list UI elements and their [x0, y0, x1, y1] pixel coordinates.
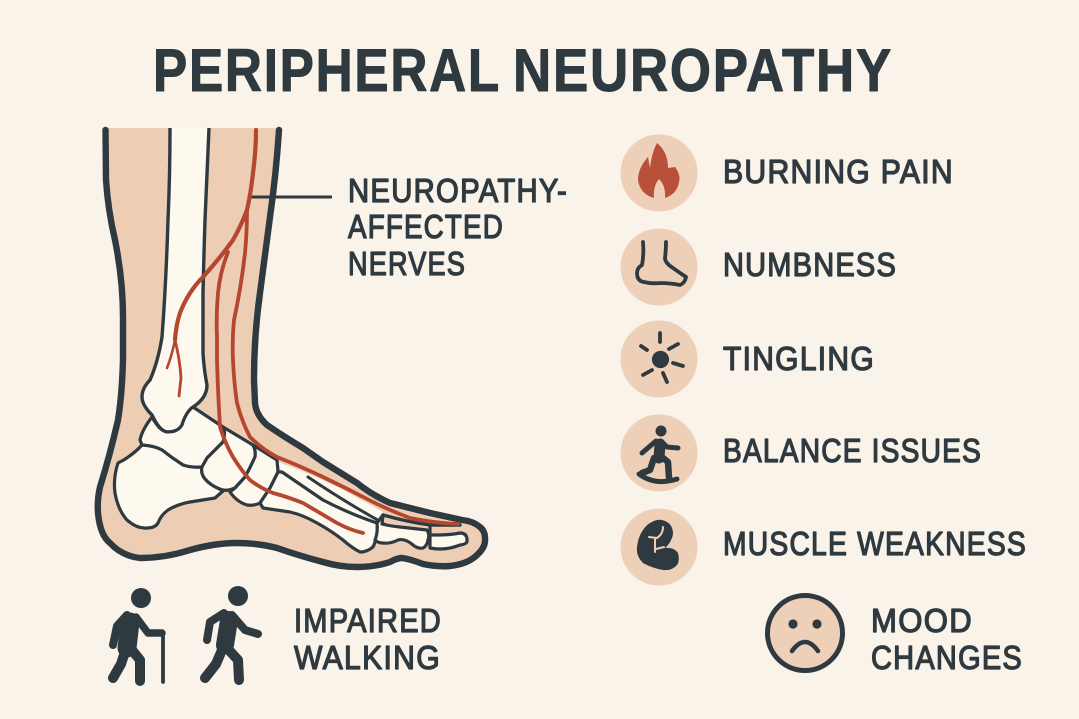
toe phalanx bone — [375, 515, 429, 548]
navicular bone — [202, 427, 255, 490]
nerve label — [348, 172, 568, 282]
leader line to nerves — [251, 196, 332, 198]
title: PERIPHERAL — [153, 37, 501, 104]
icon: figure on board — [639, 426, 678, 482]
pale strip above metatarsal — [278, 462, 383, 525]
title: NEUROPATHY — [513, 37, 893, 104]
symptom: balance issues — [620, 414, 982, 492]
label: TINGLING — [723, 340, 875, 377]
icon: flame — [638, 143, 680, 198]
symptom: burning pain — [620, 134, 954, 212]
affected nerves — [167, 130, 458, 533]
symptom: muscle weakness — [620, 508, 1027, 586]
foot anatomy illustration — [98, 128, 485, 567]
calcaneus bone — [114, 445, 223, 528]
icon: person with cane — [113, 588, 163, 682]
icon: foot — [637, 242, 686, 285]
title — [153, 37, 893, 104]
label: MUSCLE WEAKNESS — [723, 525, 1027, 562]
nerve label: NERVES — [348, 245, 466, 282]
label: NUMBNESS — [723, 246, 897, 283]
upper toe line — [383, 515, 460, 525]
icon: walking person — [205, 586, 258, 680]
label: BURNING PAIN — [723, 153, 954, 190]
icon: sun burst — [641, 333, 683, 382]
mood changes: CHANGES — [871, 639, 1023, 676]
outer leg and foot outline — [98, 130, 485, 567]
impaired walking — [113, 586, 442, 682]
talus bone — [140, 407, 224, 467]
cuneiform bone — [230, 445, 278, 505]
icon: muscle — [637, 520, 679, 570]
mood changes — [768, 596, 1023, 676]
label: BALANCE ISSUES — [723, 432, 982, 469]
toe tip bone — [430, 525, 467, 549]
label: IMPAIRED — [294, 602, 442, 639]
nerve label: NEUROPATHY- — [348, 172, 568, 209]
skin of leg and foot — [98, 128, 485, 567]
symptom: tingling — [620, 320, 875, 398]
impaired walking: WALKING — [294, 639, 441, 676]
second metatarsal line — [308, 477, 383, 523]
metatarsal bone — [260, 472, 378, 552]
icon: sad face — [768, 596, 842, 670]
tibia bone — [142, 128, 209, 432]
nerve label: AFFECTED — [348, 208, 504, 245]
symptom: numbness — [620, 228, 897, 306]
label: MOOD — [871, 602, 973, 639]
